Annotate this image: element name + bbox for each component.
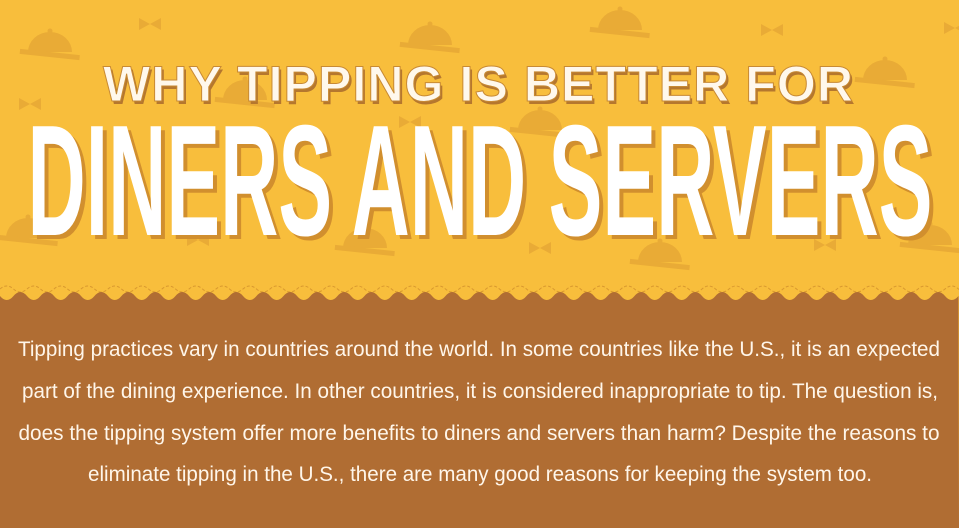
intro paragraph: part of the dining experience. In other countries, it is considered inappropriate to tip. The question is, (22, 380, 938, 403)
intro paragraph: does the tipping system offer more benefits to diners and servers than harm? Despite the reasons to (18, 422, 940, 445)
intro paragraph: eliminate tipping in the U.S., there are many good reasons for keeping the system too. (88, 463, 872, 486)
intro paragraph (18, 338, 940, 486)
title line 1: WHY TIPPING IS BETTER FOR (103, 56, 853, 112)
decorative cloches and bow ties (0, 6, 959, 270)
intro paragraph: Tipping practices vary in countries around the world. In some countries like the U.S., it is an expected (18, 338, 940, 361)
title line 1: WHY TIPPING IS BETTER FOR (105, 59, 855, 115)
wavy divider (0, 286, 959, 528)
